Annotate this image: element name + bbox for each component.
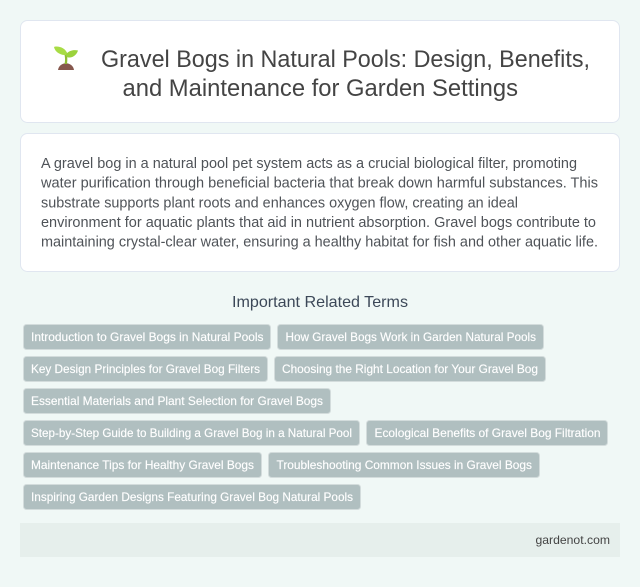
title [101,46,590,102]
tag [268,452,540,478]
text block: description: substrate supports plant roots and enhances oxygen flow, creating an ideal [41,196,518,212]
tag [24,484,360,510]
title: Gravel Bogs in Natural Pools: Design, Benefits, [101,46,590,73]
tag: Troubleshooting Common Issues in Gravel Bogs [276,458,532,472]
tag: Inspiring Garden Designs Featuring Gravel Bog Natural Pools [31,490,353,504]
text block: description: environment for aquatic plants that aid in nutrient absorption. Gravel bogs contribute to [41,215,596,231]
panel: header card [20,20,620,122]
text block: description: A gravel bog in a natural pool pet system acts as a crucial biological filter, promoting [41,156,577,172]
tag [278,324,544,350]
tag list [24,324,608,510]
tag: Key Design Principles for Gravel Bog Filters [31,362,260,376]
tag [274,356,546,382]
footer source text: gardenot.com [536,533,610,547]
tag: Maintenance Tips for Healthy Gravel Bogs [31,458,254,472]
tag [24,388,330,414]
tag [24,420,360,446]
tag [24,356,268,382]
tag: Introduction to Gravel Bogs in Natural Pools [31,330,264,344]
tag [24,324,270,350]
icon: seedling [54,46,78,70]
footer [20,523,620,557]
tag: Essential Materials and Plant Selection for Gravel Bogs [31,394,323,408]
text block: description: maintaining crystal-clear water, ensuring a healthy habitat for fish and other aquatic life. [41,234,598,250]
tag [24,452,262,478]
tag: Step-by-Step Guide to Building a Gravel Bog in a Natural Pool [31,426,352,440]
tag: Ecological Benefits of Gravel Bog Filtration [374,426,600,440]
heading: related terms: Important Related Terms [232,294,408,311]
title: and Maintenance for Garden Settings [122,75,518,102]
panel: description card [20,134,620,272]
text block: description: water purification through beneficial bacteria that break down harmful substances. This [40,176,598,192]
text block: description [40,156,598,250]
tag [366,420,608,446]
tag: Choosing the Right Location for Your Gravel Bog [282,362,538,376]
tag: How Gravel Bogs Work in Garden Natural Pools [286,330,536,344]
